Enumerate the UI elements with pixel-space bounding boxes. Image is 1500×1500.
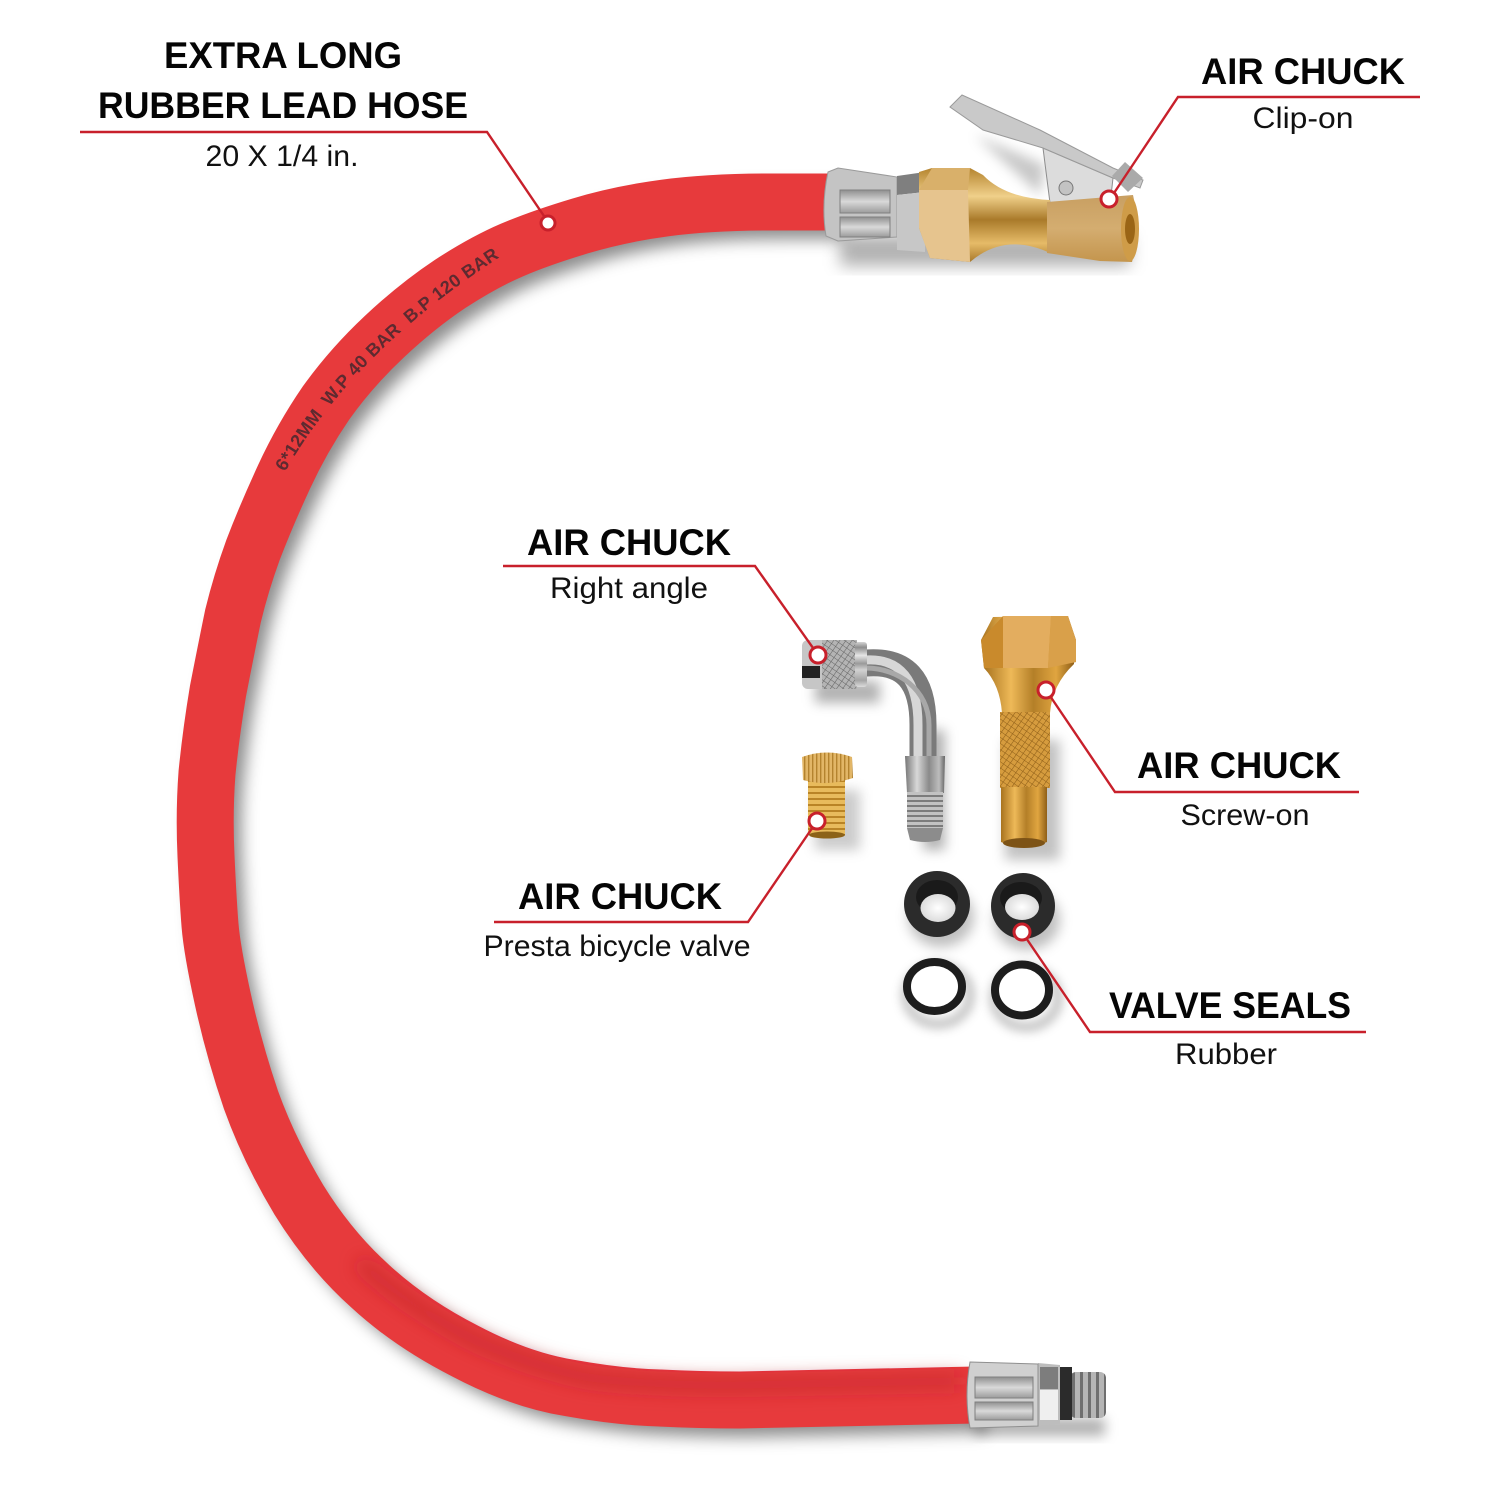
callout: clip-on air chuck: AIR CHUCK [1201, 51, 1405, 92]
callout: screw-on air chuck: AIR CHUCK [1137, 745, 1341, 786]
callout: clip-on air chuck: Clip-on [1252, 102, 1354, 135]
clip-on air chuck [824, 95, 1143, 266]
callout: valve seals: Rubber [1175, 1038, 1277, 1071]
callout: presta bicycle valve chuck: Presta bicycle valve [484, 930, 750, 963]
rubber valve seals [904, 871, 1060, 1027]
callout: right angle air chuck: Right angle [550, 572, 708, 605]
callout: presta bicycle valve chuck [484, 813, 825, 963]
callout: valve seals: VALVE SEALS [1109, 985, 1351, 1026]
callout: extra long rubber lead hose: 20 X 1/4 in. [206, 140, 358, 173]
callout: screw-on air chuck: Screw-on [1180, 799, 1310, 832]
callout: extra long rubber lead hose: EXTRA LONG [164, 35, 402, 76]
screw-on air chuck [981, 616, 1076, 860]
hose printed text: 6*12MM W.P 40 BAR B.P 120 BAR [276, 248, 500, 470]
callout: presta bicycle valve chuck: AIR CHUCK [518, 876, 722, 917]
callout: extra long rubber lead hose [80, 35, 555, 230]
callout: clip-on air chuck [1101, 51, 1420, 207]
callout: right angle air chuck [503, 522, 826, 663]
callout: right angle air chuck: AIR CHUCK [527, 522, 731, 563]
bottom threaded fitting [967, 1362, 1106, 1436]
callout: valve seals [1014, 924, 1366, 1071]
presta bicycle valve chuck [802, 752, 860, 850]
callout: extra long rubber lead hose: RUBBER LEAD HOSE [98, 85, 468, 126]
hose with printed text [176, 174, 994, 1448]
callout: screw-on air chuck [1038, 682, 1359, 832]
right angle air chuck [802, 640, 945, 850]
